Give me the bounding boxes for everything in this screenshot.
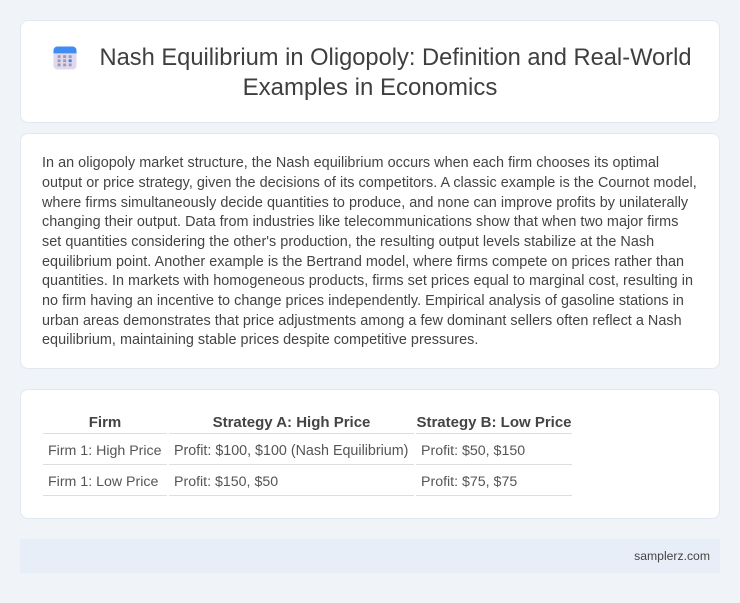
- description paragraph: output or price strategy, given the decisions of its competitors. A classic example is the Cournot model,: [42, 175, 697, 191]
- table row: low price: Profit: $150, $50: [174, 474, 278, 490]
- description paragraph: [42, 155, 697, 348]
- description paragraph: changing their output. Data from industries like telecommunications show that when two major firms: [42, 214, 678, 230]
- description paragraph: no firm having an incentive to change prices independently. Empirical analysis of gasoline stations in: [42, 293, 684, 309]
- title: Examples in Economics: [243, 74, 497, 101]
- panel: title header: [20, 20, 720, 123]
- description paragraph: In an oligopoly market structure, the Nash equilibrium occurs when each firm chooses its optimal: [42, 155, 659, 171]
- panel: payoff table: [20, 389, 720, 519]
- table row: low price: Profit: $75, $75: [421, 474, 517, 490]
- description paragraph: equilibrium point. Another example is the Bertrand model, where firms compete on prices rather than: [42, 254, 684, 270]
- table header: Strategy A: High Price: [213, 414, 370, 431]
- table row: high price: Firm 1: High Price: [48, 443, 162, 459]
- table row: high price: [43, 443, 572, 465]
- footer bar: [20, 539, 720, 573]
- description paragraph: set quantities considering the other's production, the resulting output levels stabilize at the Nash: [42, 234, 654, 250]
- description paragraph: equilibrium, maintaining stable prices despite competitive pressures.: [42, 332, 478, 348]
- table header: Firm: [89, 414, 121, 431]
- description paragraph: quantities. In markets with homogeneous products, firms set prices equal to marginal cost, resulting in: [42, 273, 693, 289]
- panel: description text: [20, 133, 720, 369]
- title: [99, 45, 692, 101]
- table row: high price: Profit: $100, $100 (Nash Equilibrium): [174, 443, 408, 459]
- footer source text: samplerz.com: [634, 549, 710, 563]
- table header: [43, 414, 572, 434]
- table row: high price: Profit: $50, $150: [421, 443, 525, 459]
- description paragraph: where firms simultaneously decide quantities to produce, and none can improve profits by unilaterally: [42, 195, 688, 211]
- icon: calendar app: [53, 46, 77, 70]
- table header: Strategy B: Low Price: [416, 414, 572, 431]
- title: Nash Equilibrium in Oligopoly: Definition and Real-World: [99, 45, 692, 71]
- description paragraph: urban areas demonstrates that price adjustments among a few dominant sellers often reflect a Nash: [42, 313, 682, 329]
- table row: low price: Firm 1: Low Price: [48, 474, 158, 490]
- table row: low price: [43, 474, 572, 496]
